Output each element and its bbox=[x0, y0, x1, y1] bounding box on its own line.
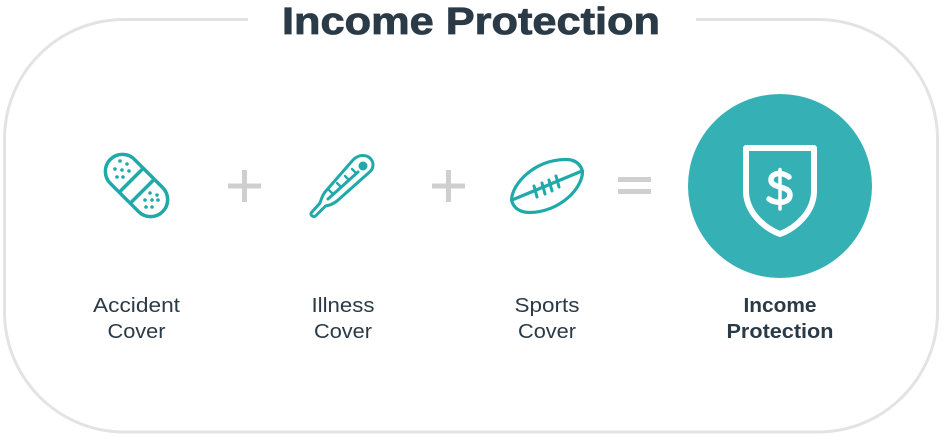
label: income protection: Income bbox=[744, 294, 816, 317]
plus sign 2 bbox=[432, 170, 465, 202]
icon: rugby ball bbox=[512, 159, 583, 213]
label: income protection: Protection bbox=[726, 320, 834, 343]
teal circle with shield icon bbox=[688, 94, 872, 278]
icon: shield bbox=[746, 148, 814, 234]
label: accident cover: Cover bbox=[108, 320, 166, 343]
label: accident cover: Accident bbox=[93, 294, 180, 317]
label: sports cover: Sports bbox=[514, 294, 580, 317]
label: accident cover bbox=[93, 294, 180, 343]
dollar sign bbox=[769, 170, 790, 209]
title: Income Protection bbox=[282, 1, 660, 43]
label: sports cover: Cover bbox=[518, 320, 576, 343]
icon: thermometer bbox=[311, 156, 373, 217]
label: illness cover bbox=[312, 294, 374, 343]
label: illness cover: Illness bbox=[312, 294, 374, 317]
label: sports cover bbox=[514, 294, 580, 343]
label: illness cover: Cover bbox=[314, 320, 372, 343]
icon: bandage bbox=[98, 147, 175, 224]
plus sign 1 bbox=[228, 170, 261, 202]
equals sign bbox=[618, 180, 651, 192]
label: income protection bbox=[726, 294, 834, 343]
